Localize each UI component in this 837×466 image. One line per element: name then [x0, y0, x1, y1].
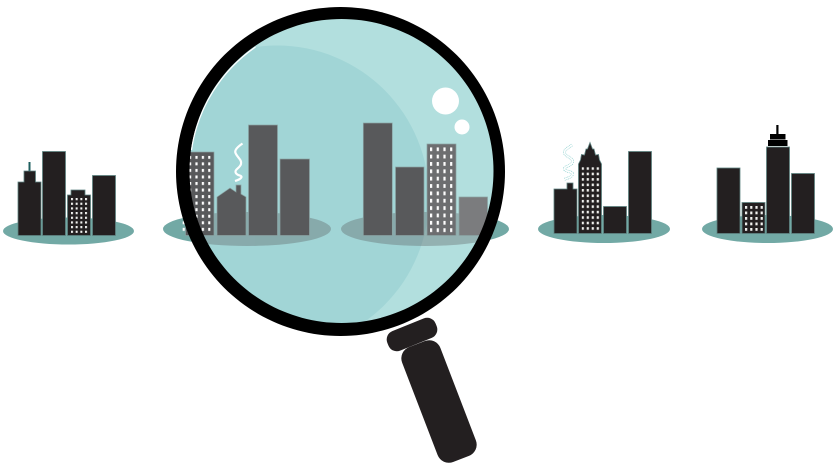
city 1 skyline [3, 152, 134, 244]
magnified windows right [430, 147, 454, 234]
ground behind lens, left [163, 212, 331, 246]
city 5 skyline [702, 125, 833, 243]
magnified windows [183, 156, 211, 232]
icon: city 4 smoke [564, 145, 573, 180]
city 5 buildings [717, 147, 814, 234]
city 4 windows [582, 167, 600, 231]
lens highlight bubble large [432, 88, 459, 114]
lens highlight bubble small [454, 120, 470, 134]
magnified mid tower [280, 159, 310, 236]
magnifier ring [176, 7, 505, 336]
magnified low block [459, 197, 488, 236]
magnified window tower [186, 152, 214, 236]
magnified left city [183, 125, 310, 236]
magnifier collar [384, 315, 440, 354]
magnified tall tower [248, 125, 278, 236]
city 1 windows [71, 198, 88, 234]
magnified house [217, 185, 246, 236]
magnifier handle [398, 337, 480, 466]
magnified window tower right [427, 144, 456, 236]
city 4 buildings [554, 142, 652, 234]
magnified tall tower right [363, 123, 392, 236]
magnified right city [363, 123, 488, 236]
magnified ground [204, 212, 479, 246]
city 4 ground [538, 215, 670, 243]
city 1 buildings [18, 152, 116, 236]
magnified short tower [396, 167, 424, 236]
city 5 ground [702, 215, 833, 243]
glint on ring edge [192, 47, 256, 150]
city 1 ground [3, 218, 134, 244]
city 4 skyline [538, 142, 670, 243]
ground behind lens, right [341, 212, 509, 246]
lens light glass [253, 19, 494, 322]
city 5 tower top [768, 125, 788, 146]
lens darker crescent [191, 46, 426, 323]
icon: white smoke [235, 144, 242, 181]
magnifier lens [190, 19, 494, 323]
city 5 windows [745, 206, 765, 232]
